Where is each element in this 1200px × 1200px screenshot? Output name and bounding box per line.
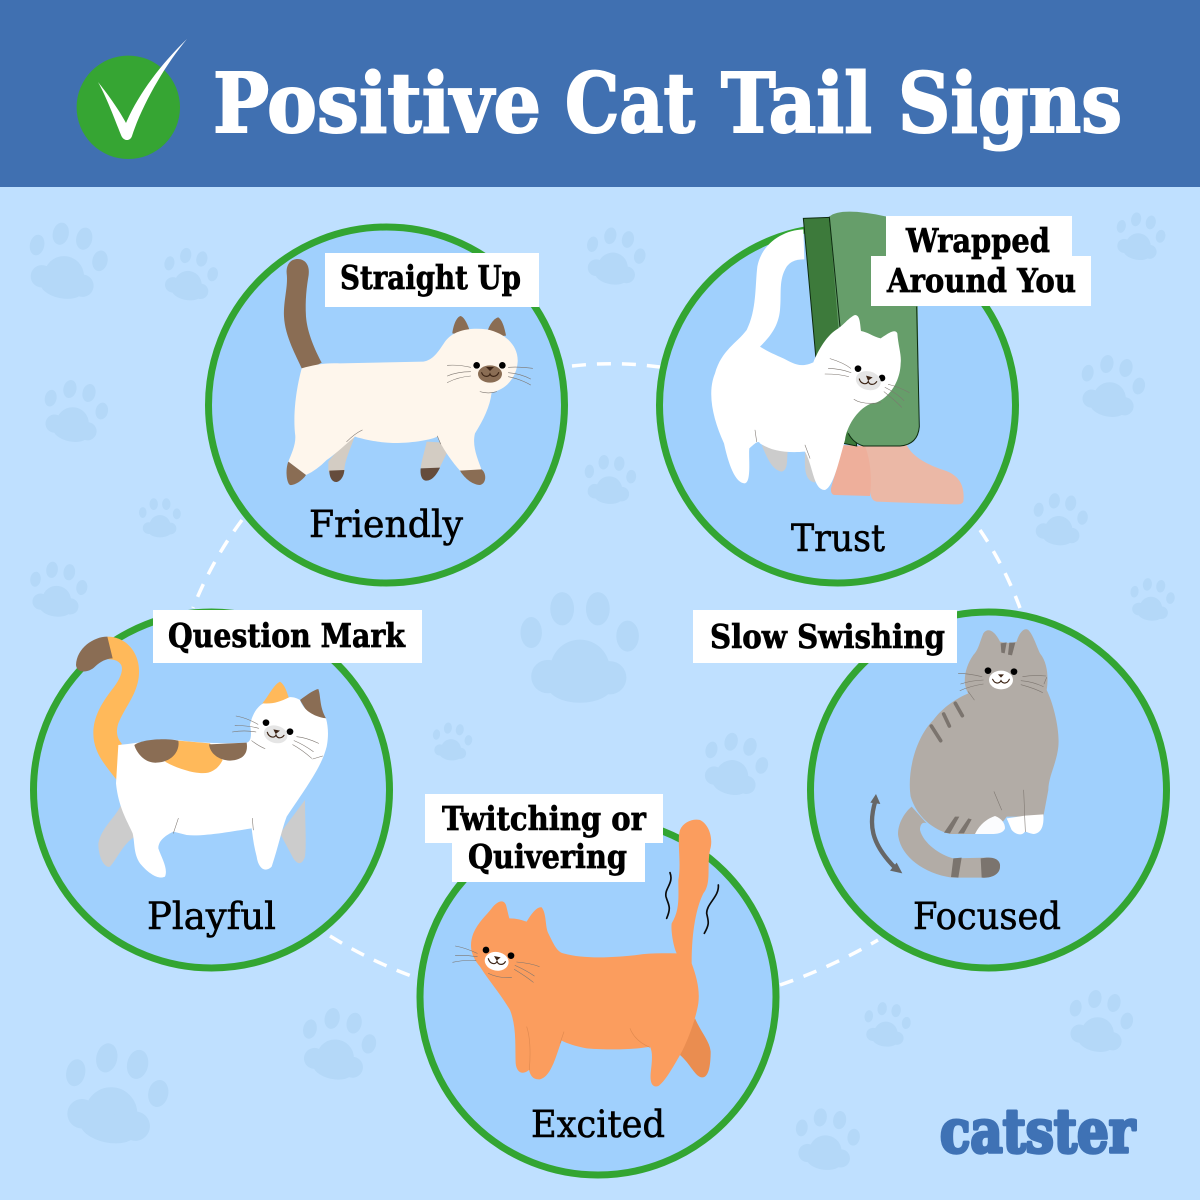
panel: friendly	[208, 227, 564, 583]
behaviour label: question mark	[153, 610, 422, 663]
header banner	[0, 0, 1200, 187]
mood label: playful: Playful	[147, 895, 276, 938]
behaviour label: question mark: Question Mark	[168, 616, 406, 655]
mood label: focused: Focused	[913, 895, 1061, 938]
behaviour label: twitching or quivering	[425, 794, 663, 882]
behaviour label: straight up	[325, 253, 539, 307]
cat: orange with twitching tail	[453, 820, 718, 1086]
title: Positive	[213, 56, 541, 152]
mood label: trust: Trust	[791, 517, 885, 560]
behaviour label: wrapped around you: Around You	[886, 261, 1076, 300]
behaviour label: twitching or quivering: Quivering	[468, 837, 627, 876]
behaviour label: wrapped around you: Wrapped	[905, 221, 1050, 260]
panel: trust	[660, 212, 1091, 583]
title: Cat	[565, 56, 695, 152]
title: Tail	[721, 56, 872, 152]
title: Signs	[898, 56, 1122, 152]
cat: siamese with straight up tail	[284, 259, 533, 485]
cat: grey tabby with slow swishing tail	[870, 629, 1059, 878]
panel: playful	[34, 610, 422, 968]
icon: green check mark	[77, 39, 187, 159]
mood label: friendly: Friendly	[309, 503, 463, 546]
panel: excited	[420, 794, 776, 1175]
behaviour label: slow swishing: Slow Swishing	[710, 617, 945, 656]
logo: catster: catster	[940, 1097, 1136, 1167]
behaviour label: slow swishing	[693, 610, 957, 663]
behaviour label: straight up: Straight Up	[340, 258, 521, 297]
panel: focused	[693, 610, 1166, 968]
behaviour label: wrapped around you	[871, 216, 1091, 306]
behaviour label: twitching or quivering: Twitching or	[442, 799, 647, 838]
mood label: excited: Excited	[531, 1103, 665, 1146]
cat and leg: white cat wrapping tail around leg	[711, 212, 964, 504]
cat: calico with question mark tail	[76, 637, 328, 878]
